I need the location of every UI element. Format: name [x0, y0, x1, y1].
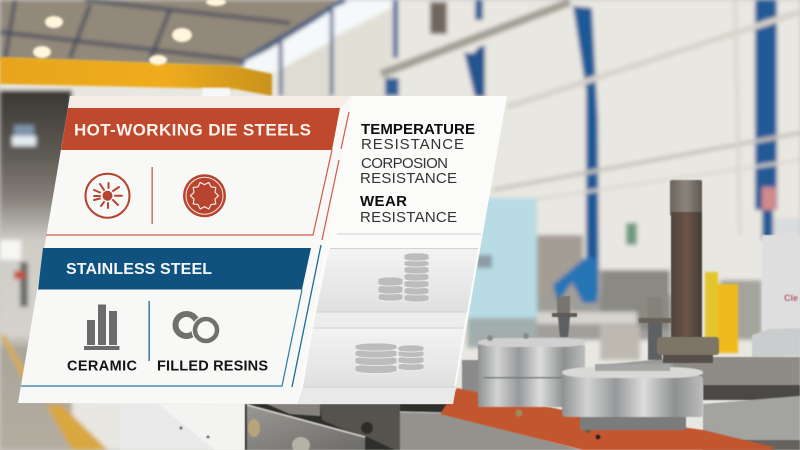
grey section: upper coins: [316, 249, 478, 312]
blue outline of lower section: [21, 290, 302, 386]
crane beam: [0, 57, 272, 96]
label: temperature resistance: RESISTANCE: [361, 136, 464, 153]
wall beneath windows: [282, 42, 330, 100]
red outline of top section: [46, 150, 332, 235]
ceiling lights: [33, 0, 230, 98]
icon: tall coin stacks: [378, 253, 429, 302]
machinery: pins: [552, 296, 671, 360]
label: corposion resistance: CORPOSION: [361, 155, 448, 172]
card background: [18, 96, 352, 404]
label: temperature resistance: [361, 121, 475, 153]
heading band: stainless steel: STAINLESS STEEL: [66, 261, 212, 278]
property labels: [360, 121, 475, 226]
label: ceramic: CERAMIC: [67, 358, 138, 374]
accent line: red top: [341, 112, 349, 149]
grey footer: [297, 387, 456, 404]
machinery: orange bar: [440, 385, 773, 450]
machinery: right steel cylinder: [562, 364, 703, 430]
label: wear resistance: [360, 193, 457, 226]
heading band: hot-working die steels: [61, 108, 340, 150]
blue arm: [553, 258, 597, 303]
right card background: [297, 96, 507, 404]
accent line: blue: [292, 245, 321, 387]
windows: [245, 45, 278, 72]
machinery: bottom left plate: [120, 404, 248, 450]
wall beams: [381, 2, 570, 74]
card top tint strip: [68, 96, 350, 108]
heading band: stainless steel: [38, 248, 311, 290]
label: temperature resistance: TEMPERATURE: [361, 121, 475, 138]
machinery: table and lower beds: [462, 357, 800, 450]
light blue machine: [467, 198, 537, 333]
heading band: hot-working die steels: HOT-WORKING DIE STEELS: [74, 120, 311, 140]
panel: left material card: [18, 96, 352, 404]
icon: sun / temperature: [86, 174, 130, 218]
separator lines: [303, 234, 481, 387]
grey band: [313, 312, 467, 328]
machinery: yellow block: [705, 272, 738, 353]
grey section: lower coins: [303, 328, 464, 387]
machinery: left steel cylinder: [478, 333, 585, 407]
columns: [279, 42, 282, 96]
label: corposion resistance: RESISTANCE: [360, 170, 457, 187]
label: filled resins: FILLED RESINS: [157, 358, 268, 374]
machinery: rod and collar: [657, 180, 719, 363]
machinery: bottom metal blocks: [245, 404, 583, 450]
accent line: red to blue lower: [322, 160, 339, 240]
divider: blue: [148, 301, 150, 361]
icon: wide coin stacks: [355, 343, 424, 374]
ceiling beams: [0, 0, 290, 60]
label: corposion resistance: [360, 155, 457, 187]
icon: gear: [183, 174, 226, 217]
mid ground machines: [537, 295, 672, 340]
icon: ceramic bars: [84, 304, 120, 350]
label: wear resistance: RESISTANCE: [360, 209, 457, 226]
grey cabinet: [537, 235, 583, 300]
divider: red: [152, 167, 153, 224]
machinery: white box with label: Cle: [784, 293, 798, 303]
machinery: white box with label: [752, 235, 800, 357]
label: wear resistance: WEAR: [360, 193, 407, 210]
icon: filled resin rings: [176, 314, 220, 344]
panel: right properties card: [292, 96, 507, 404]
